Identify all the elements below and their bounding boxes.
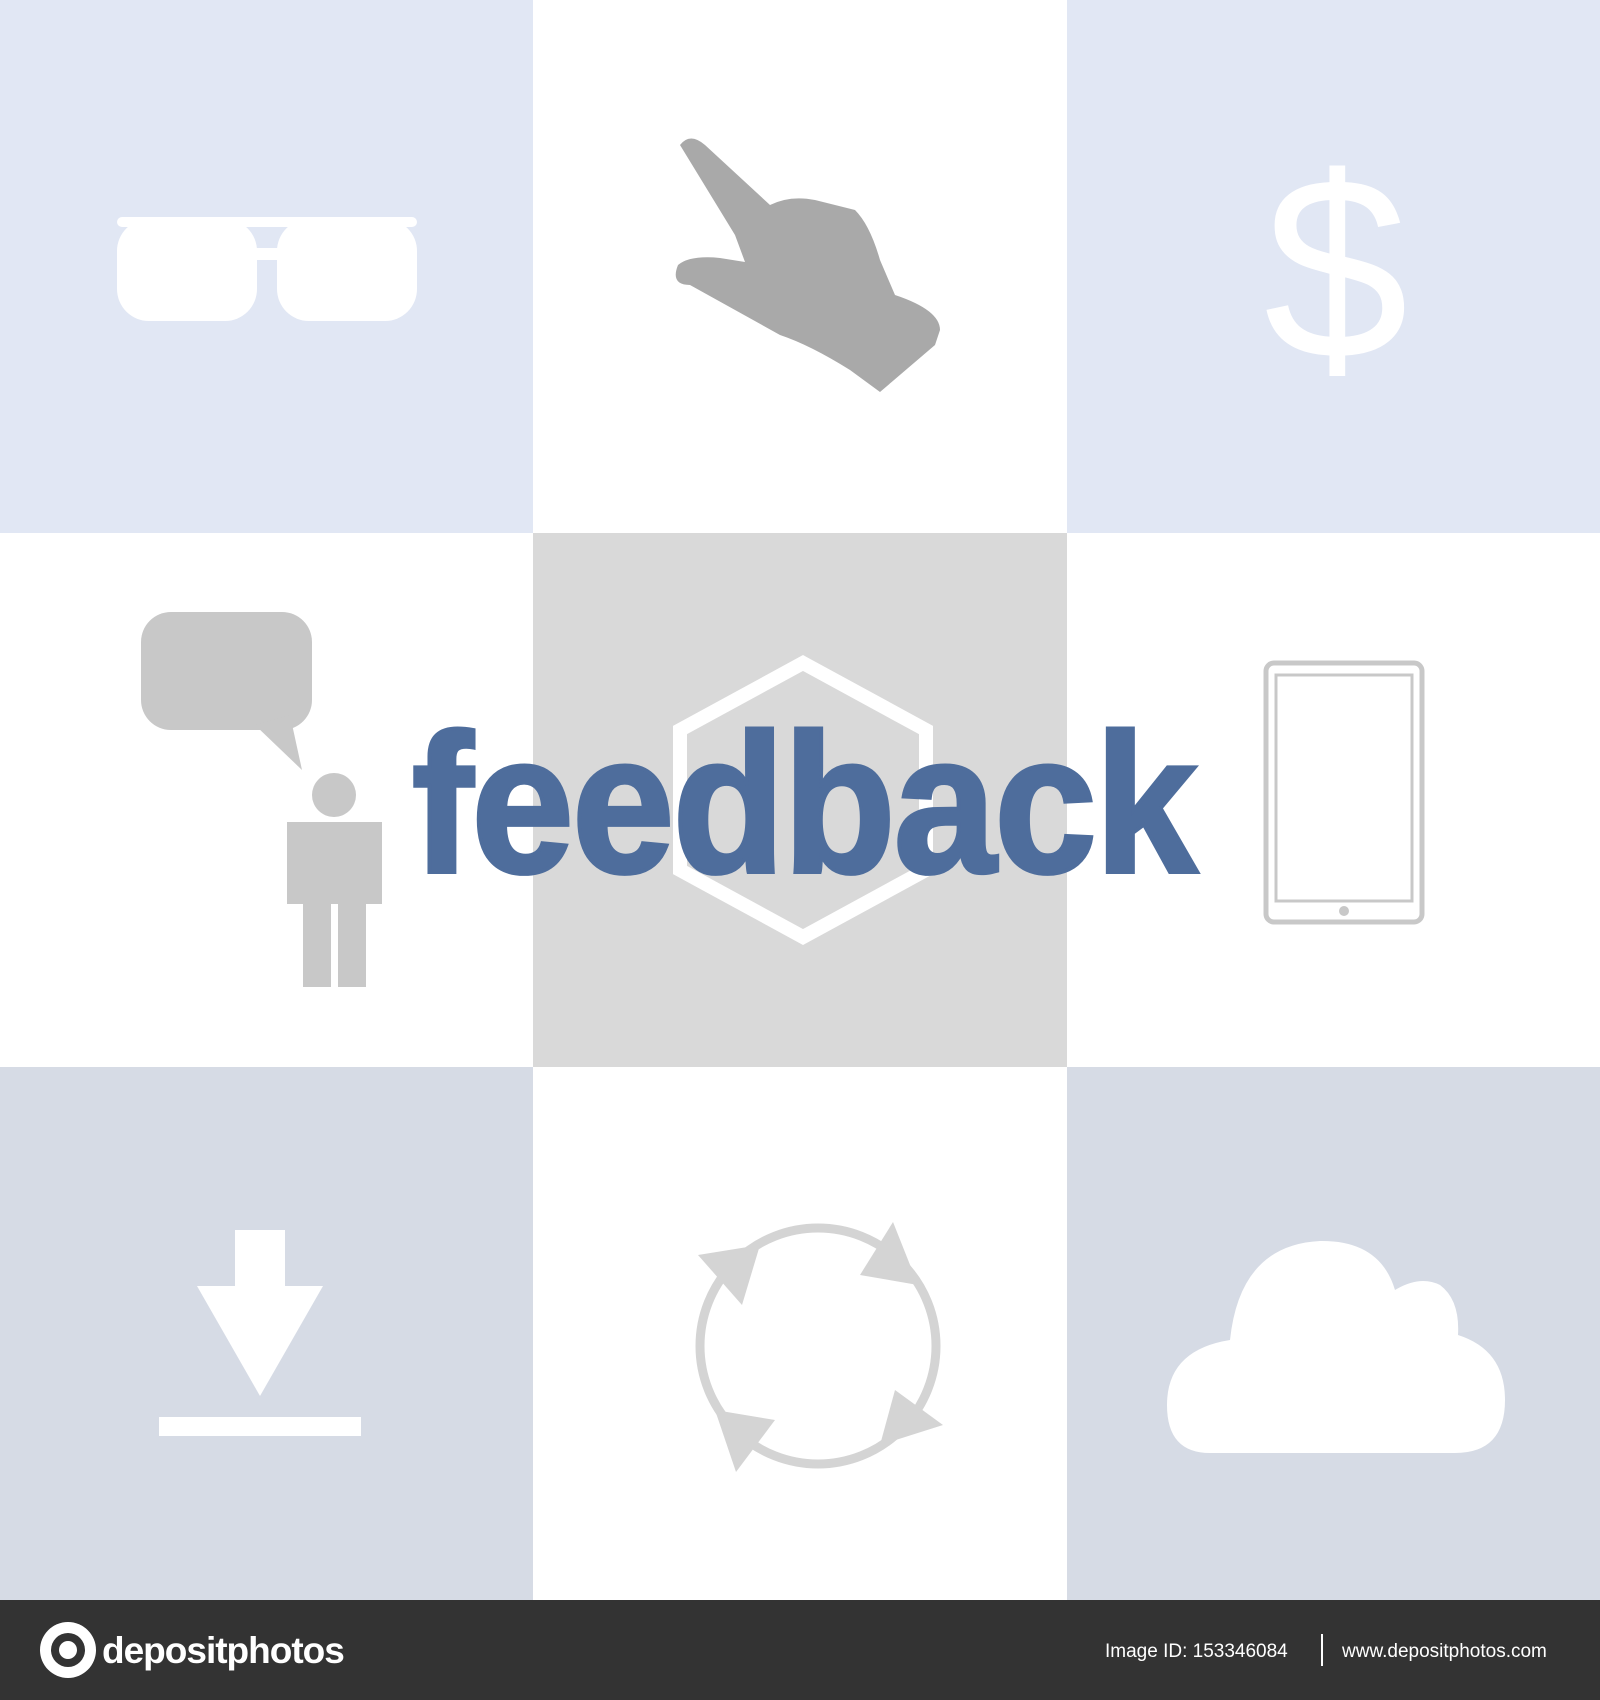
panel: middle-right <box>1067 533 1600 1067</box>
footer bar <box>0 1600 1600 1700</box>
panel: bottom-left <box>0 1067 533 1600</box>
icon: cycle arrows <box>698 1222 943 1472</box>
panel: top-left <box>0 0 533 533</box>
panel: bottom-middle <box>533 1067 1067 1600</box>
footer logo: depositphotos <box>102 1630 344 1671</box>
icon: speech bubble <box>141 612 312 770</box>
panel: top-middle <box>533 0 1067 533</box>
panel: bottom-right <box>1067 1067 1600 1600</box>
icon: cloud <box>1167 1241 1505 1453</box>
icon: download <box>159 1230 361 1436</box>
footer logo <box>40 1622 344 1678</box>
icon: pointing hand <box>676 138 940 392</box>
footer: image id: Image ID: 153346084 <box>1105 1641 1288 1662</box>
icon: glasses <box>117 217 417 321</box>
icon: dollar: $ <box>1264 124 1408 414</box>
panel: middle-left <box>0 533 533 1067</box>
footer: url: www.depositphotos.com <box>1341 1641 1547 1662</box>
panel: top-right <box>1067 0 1600 533</box>
icon: tablet <box>1266 663 1422 922</box>
title: feedback: feedback <box>412 693 1198 914</box>
icon: person <box>287 773 382 987</box>
panel: center <box>533 533 1067 1067</box>
icon: hexagon <box>680 663 926 937</box>
